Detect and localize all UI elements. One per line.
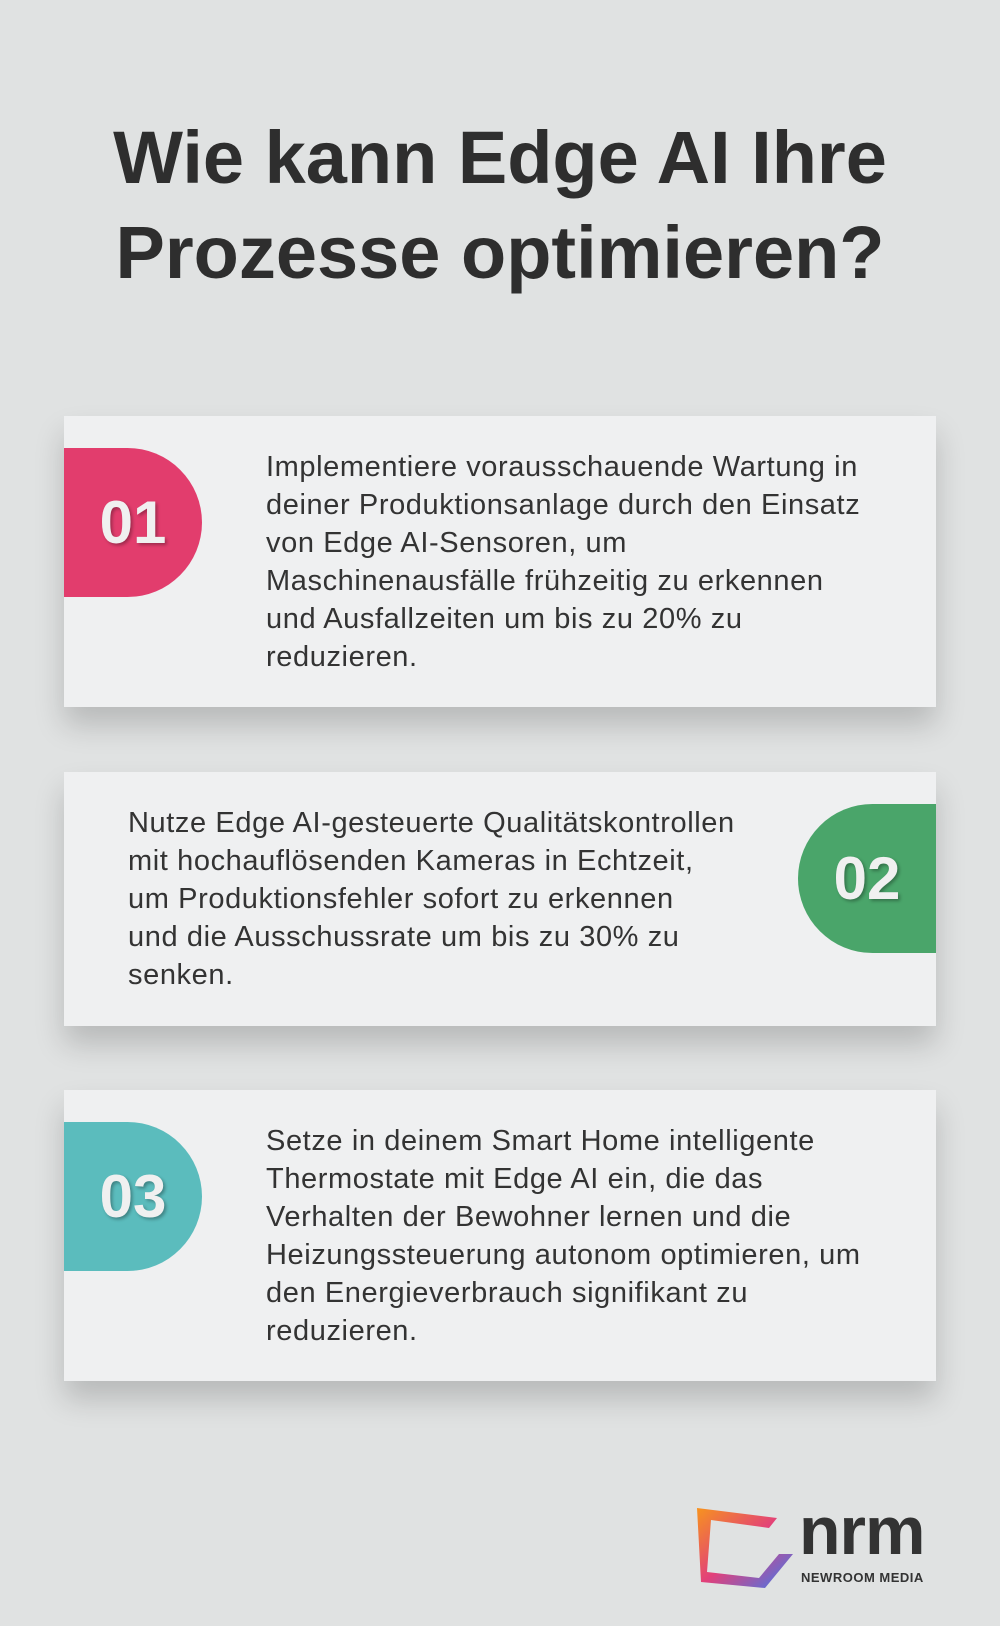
icon: logo mark xyxy=(697,1508,793,1588)
badge 01 xyxy=(64,448,202,597)
badge 03 xyxy=(64,1122,202,1271)
text 3 xyxy=(266,1125,861,1347)
text 2 xyxy=(128,807,735,991)
title: Wie kann Edge AI Ihre xyxy=(113,116,887,199)
text 2: mit hochauflösenden Kameras in Echtzeit, xyxy=(128,845,694,877)
badge 02: 02 xyxy=(834,845,900,912)
text 3: Thermostate mit Edge AI ein, die das xyxy=(266,1163,763,1195)
text 3: Verhalten der Bewohner lernen und die xyxy=(266,1201,791,1233)
badge 02 xyxy=(798,804,936,953)
text 1: und Ausfallzeiten um bis zu 20% zu xyxy=(266,603,743,635)
title: Prozesse optimieren? xyxy=(115,211,884,294)
badge 01: 01 xyxy=(100,489,166,556)
logo text: nrm xyxy=(799,1493,924,1569)
text 1: Implementiere vorausschauende Wartung in xyxy=(266,451,858,483)
title xyxy=(113,116,887,294)
panel: card 2 xyxy=(64,772,936,1026)
logo xyxy=(697,1493,924,1588)
text 2: und die Ausschussrate um bis zu 30% zu xyxy=(128,921,680,953)
text 1: reduzieren. xyxy=(266,641,418,673)
text 1: deiner Produktionsanlage durch den Einsatz xyxy=(266,489,860,521)
panel: card 1 xyxy=(64,416,936,707)
text 1 xyxy=(266,451,860,673)
text 3: Setze in deinem Smart Home intelligente xyxy=(266,1125,815,1157)
text 3: Heizungssteuerung autonom optimieren, um xyxy=(266,1239,861,1271)
text 3: den Energieverbrauch signifikant zu xyxy=(266,1277,748,1309)
text 2: senken. xyxy=(128,959,234,991)
text 1: von Edge AI-Sensoren, um xyxy=(266,527,627,559)
text 1: Maschinenausfälle frühzeitig zu erkennen xyxy=(266,565,824,597)
text 2: Nutze Edge AI-gesteuerte Qualitätskontrollen xyxy=(128,807,735,839)
text 3: reduzieren. xyxy=(266,1315,418,1347)
badge 03: 03 xyxy=(100,1163,166,1230)
text 2: um Produktionsfehler sofort zu erkennen xyxy=(128,883,674,915)
panel: card 3 xyxy=(64,1090,936,1381)
logo: NEWROOM MEDIA xyxy=(801,1570,924,1585)
